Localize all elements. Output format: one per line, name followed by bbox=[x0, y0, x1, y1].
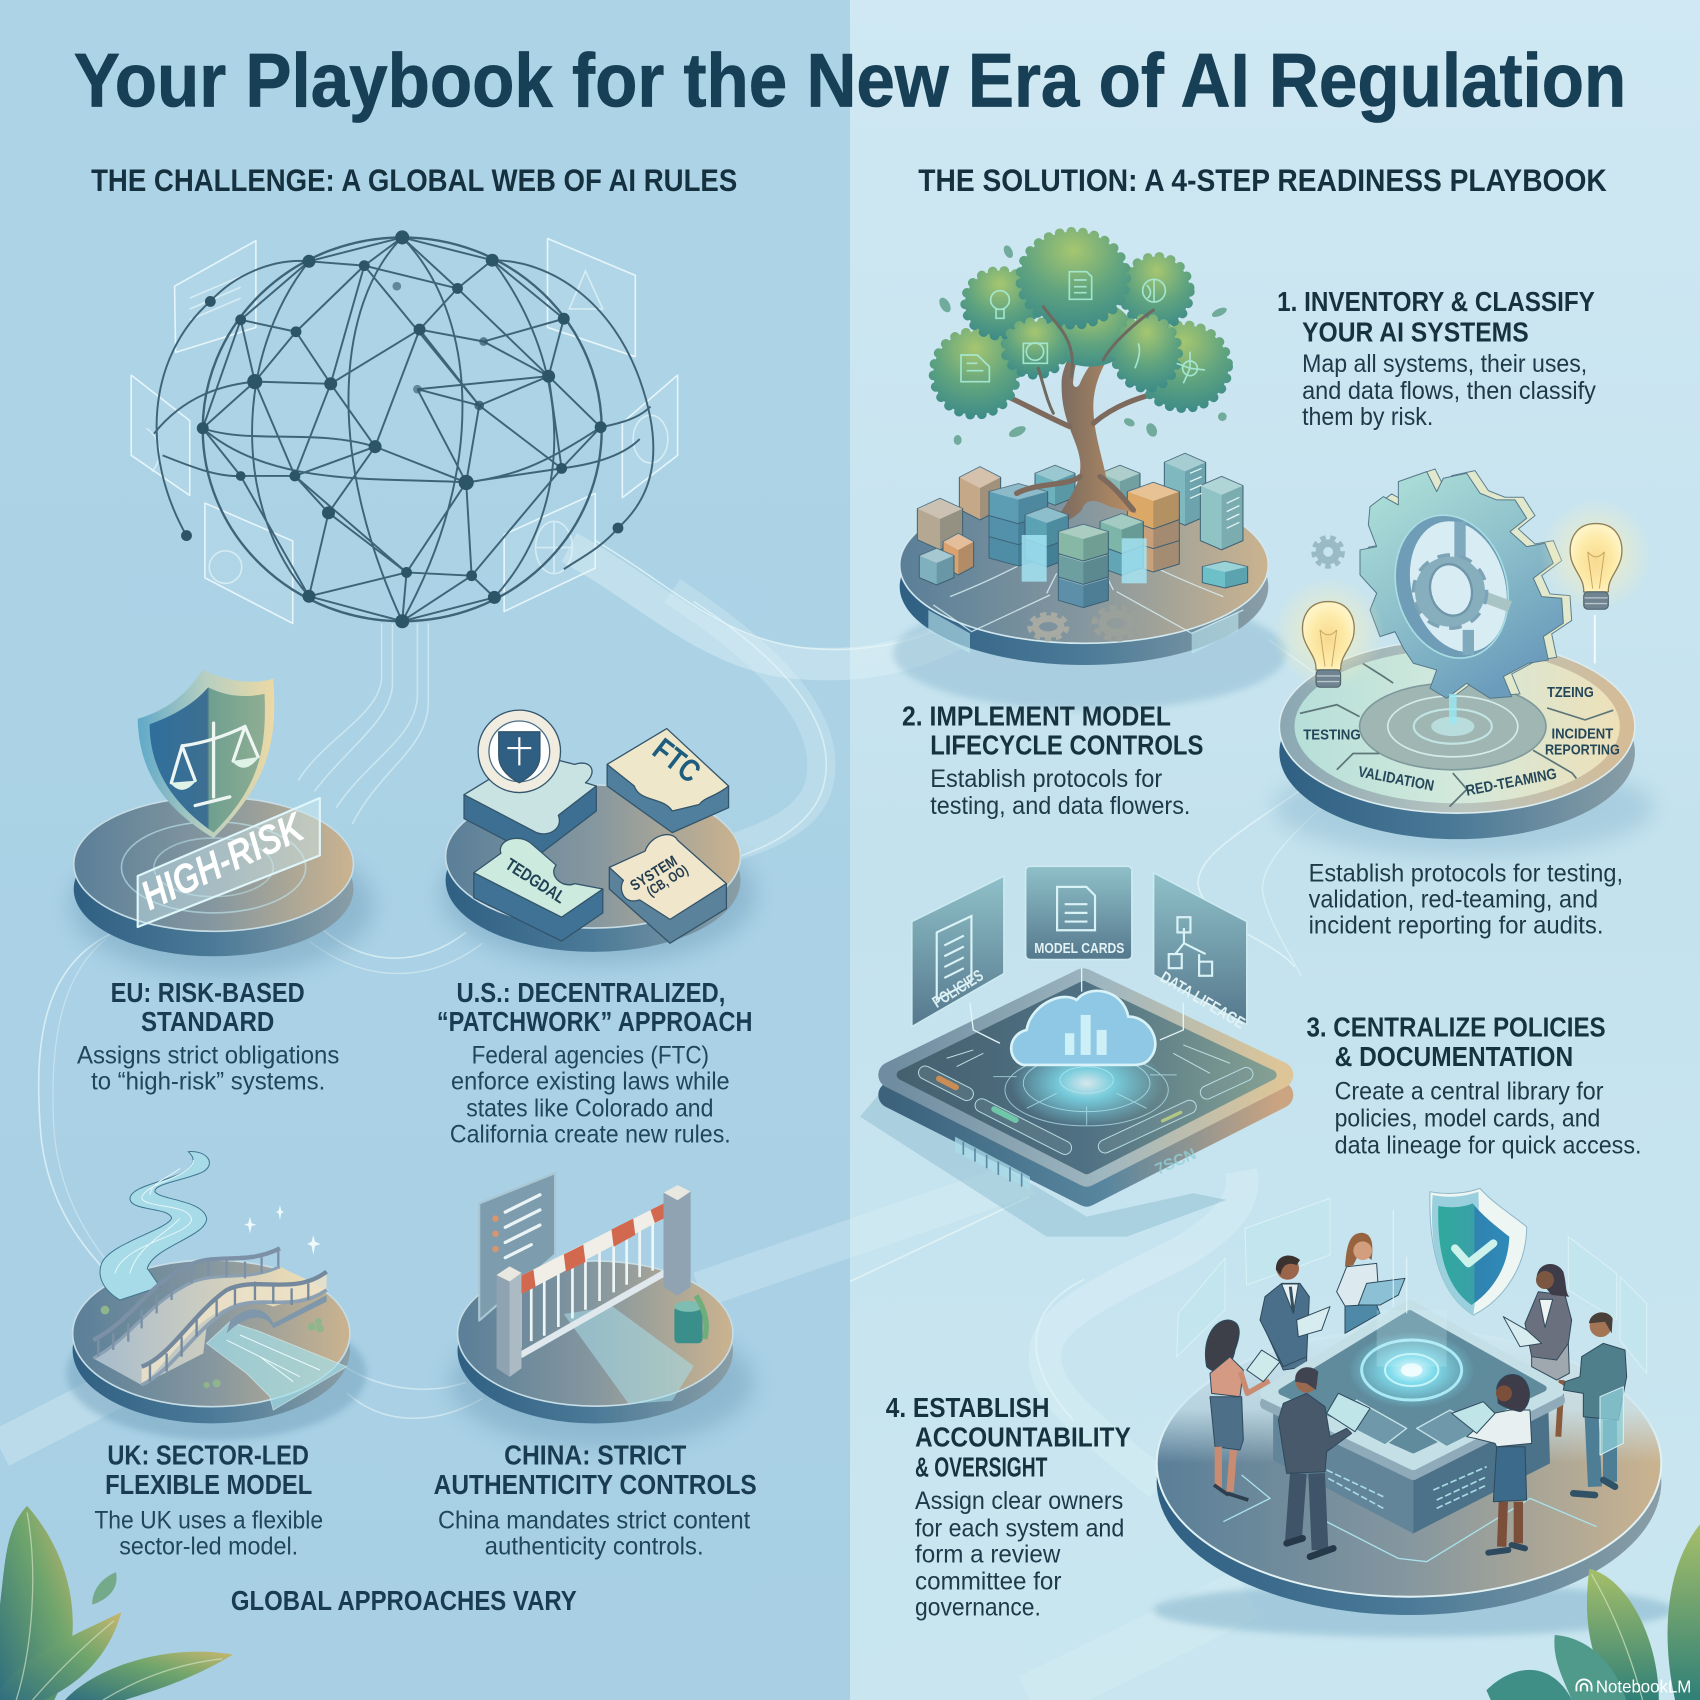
holographic panels bbox=[1177, 1198, 1647, 1373]
card: model cards: MODEL CARDS bbox=[1034, 940, 1124, 957]
text: EU: to “high-risk” systems. bbox=[91, 1068, 325, 1096]
UK disk with bridge and river bbox=[67, 1152, 367, 1440]
disk labels: TZEING bbox=[1547, 684, 1594, 701]
leaves bottom right bbox=[1486, 1524, 1700, 1700]
text: China: China mandates strict content bbox=[438, 1507, 750, 1535]
text: EU: EU: RISK-BASED bbox=[111, 976, 305, 1008]
icon: large gear bbox=[1360, 469, 1572, 698]
step 4 text: for each system and bbox=[915, 1514, 1124, 1542]
text: China bbox=[434, 1439, 757, 1561]
puzzle piece: FTC bbox=[607, 729, 729, 833]
text: UK: sector-led model. bbox=[119, 1533, 298, 1561]
card: policies bbox=[912, 876, 1004, 1027]
text: US: Federal agencies (FTC) bbox=[472, 1042, 709, 1070]
step 3 text: Create a central library for bbox=[1335, 1077, 1604, 1105]
platform bbox=[860, 968, 1280, 1237]
card: data lineage bbox=[1154, 873, 1248, 1033]
step 4: people around oversight table bbox=[1153, 1188, 1673, 1637]
step 1 text bbox=[1277, 285, 1596, 431]
text: US: “PATCHWORK” APPROACH bbox=[437, 1005, 752, 1037]
puzzle piece: federal: TEDGDAL bbox=[502, 854, 570, 907]
step 4 text: committee for bbox=[915, 1567, 1061, 1595]
NotebookLM watermark: NotebookLM bbox=[1596, 1676, 1691, 1696]
step 1 text: 1. INVENTORY & CLASSIFY bbox=[1277, 285, 1595, 317]
step 4 text: & OVERSIGHT bbox=[915, 1451, 1047, 1483]
card: policies: POLICIES bbox=[929, 966, 987, 1012]
text: UK bbox=[94, 1439, 323, 1561]
tree canopy bbox=[933, 232, 1228, 415]
icon: cloud with bars bbox=[1011, 991, 1155, 1065]
step 3 text: data lineage for quick access. bbox=[1335, 1132, 1641, 1160]
text: US bbox=[437, 976, 752, 1149]
card: model cards bbox=[1026, 866, 1132, 960]
step 4 text: 4. ESTABLISH bbox=[886, 1391, 1049, 1423]
disk labels bbox=[1303, 684, 1620, 800]
puzzle piece: system bbox=[609, 835, 726, 943]
text: US: enforce existing laws while bbox=[451, 1068, 730, 1096]
step 1 text: Map all systems, their uses, bbox=[1302, 350, 1587, 378]
heading: the solution: THE SOLUTION: A 4-STEP READINESS PLAYBOOK bbox=[918, 163, 1607, 198]
puzzle piece: FTC: FTC bbox=[646, 731, 707, 790]
document panel bbox=[479, 1173, 555, 1321]
front row people bbox=[1205, 1312, 1627, 1557]
icon: bridge bbox=[93, 1248, 327, 1385]
card: data lineage: DATA LIFEAGE bbox=[1157, 968, 1248, 1033]
puzzle piece: system: (CB, OO) bbox=[644, 861, 691, 899]
US disk with puzzle pieces bbox=[441, 710, 756, 965]
text: US: California create new rules. bbox=[450, 1121, 731, 1149]
step 2: gear on lifecycle disk bbox=[1272, 469, 1653, 857]
step 4 text: Assign clear owners bbox=[915, 1487, 1123, 1515]
text: EU: STANDARD bbox=[141, 1005, 274, 1037]
text: EU bbox=[77, 976, 339, 1096]
puzzle piece: federal bbox=[474, 838, 603, 941]
text: US: U.S.: DECENTRALIZED, bbox=[456, 976, 725, 1008]
heading: the challenge: THE CHALLENGE: A GLOBAL WEB OF AI RULES bbox=[91, 163, 737, 198]
server racks and data blocks bbox=[917, 453, 1248, 588]
China disk with gate bbox=[450, 1173, 754, 1447]
text: EU: Assigns strict obligations bbox=[77, 1042, 339, 1070]
puzzle piece: seal bbox=[464, 710, 596, 857]
step 4 text bbox=[886, 1391, 1131, 1621]
step 2 detail text: Establish protocols for testing, bbox=[1309, 859, 1623, 887]
icon: barrier gate bbox=[497, 1185, 691, 1377]
step 4 text: governance. bbox=[915, 1593, 1041, 1621]
oversight table bbox=[1267, 1210, 1558, 1533]
high-risk glass sign: HIGH-RISK bbox=[134, 803, 313, 919]
text: US: states like Colorado and bbox=[466, 1095, 713, 1123]
step 1 text: YOUR AI SYSTEMS bbox=[1302, 316, 1529, 348]
globe network illustration bbox=[131, 230, 678, 628]
icon: river bbox=[100, 1152, 347, 1410]
back row people bbox=[1260, 1233, 1572, 1437]
text: UK: The UK uses a flexible bbox=[94, 1507, 323, 1535]
step 3 text bbox=[1306, 1010, 1641, 1160]
caption: global approaches vary: GLOBAL APPROACHES VARY bbox=[231, 1584, 577, 1616]
step 2 detail text bbox=[1309, 859, 1623, 939]
leaves bottom left bbox=[0, 1506, 233, 1700]
upper branches bbox=[1038, 307, 1153, 413]
step 4 text: form a review bbox=[915, 1540, 1061, 1568]
text: China: authenticity controls. bbox=[485, 1533, 704, 1561]
connecting ribbons bbox=[0, 540, 1344, 1700]
step 2 text: testing, and data flowers. bbox=[930, 792, 1190, 820]
platform: 7SCN bbox=[1153, 1146, 1199, 1179]
disk labels: TESTING bbox=[1303, 726, 1361, 743]
platform disk bbox=[1155, 1328, 1663, 1615]
step 2 text: Establish protocols for bbox=[930, 765, 1162, 793]
EU disk with shield and high-risk sign bbox=[70, 670, 374, 976]
icon: left light bulb bbox=[1272, 577, 1385, 690]
icon: check shield bbox=[1430, 1188, 1527, 1315]
step 2 detail text: incident reporting for audits. bbox=[1309, 911, 1604, 939]
step 2 text: LIFECYCLE CONTROLS bbox=[930, 729, 1203, 761]
icon: green canister bbox=[674, 1296, 706, 1343]
step 1: tree on data disk bbox=[893, 232, 1287, 710]
step 2 text bbox=[902, 699, 1203, 820]
icon: shield with scales bbox=[138, 670, 274, 838]
step 2 detail text: validation, red-teaming, and bbox=[1309, 885, 1598, 913]
step 3 text: & DOCUMENTATION bbox=[1335, 1040, 1573, 1072]
tree trunk bbox=[993, 327, 1167, 527]
step 1 text: them by risk. bbox=[1302, 403, 1433, 431]
step 3: central platform with cloud and cards bbox=[860, 866, 1280, 1237]
disk labels: VALIDATION bbox=[1357, 764, 1435, 795]
gears on disk bbox=[1030, 608, 1139, 639]
disk labels: INCIDENT bbox=[1551, 725, 1614, 742]
disk labels: RED-TEAMING bbox=[1464, 765, 1558, 800]
step 4 text: ACCOUNTABILITY bbox=[915, 1420, 1131, 1452]
text: UK: UK: SECTOR-LED bbox=[107, 1439, 309, 1471]
canopy icons bbox=[961, 272, 1205, 383]
step 3 text: 3. CENTRALIZE POLICIES bbox=[1306, 1010, 1606, 1042]
puzzle piece: system: SYSTEM bbox=[627, 853, 681, 895]
disk labels: REPORTING bbox=[1545, 742, 1620, 759]
text: China: AUTHENTICITY CONTROLS bbox=[434, 1468, 757, 1500]
front data stack with glow bbox=[1022, 507, 1147, 608]
step 2 text: 2. IMPLEMENT MODEL bbox=[902, 699, 1171, 731]
step 1 text: and data flows, then classify bbox=[1302, 377, 1596, 405]
icon: right light bulb bbox=[1539, 499, 1653, 664]
background: right panel bbox=[850, 0, 1700, 1700]
background: left panel bbox=[0, 0, 850, 1700]
text: China: CHINA: STRICT bbox=[504, 1439, 686, 1471]
text: UK: FLEXIBLE MODEL bbox=[105, 1468, 312, 1500]
step 3 text: policies, model cards, and bbox=[1335, 1104, 1600, 1132]
icon: small gear bbox=[1314, 538, 1342, 566]
